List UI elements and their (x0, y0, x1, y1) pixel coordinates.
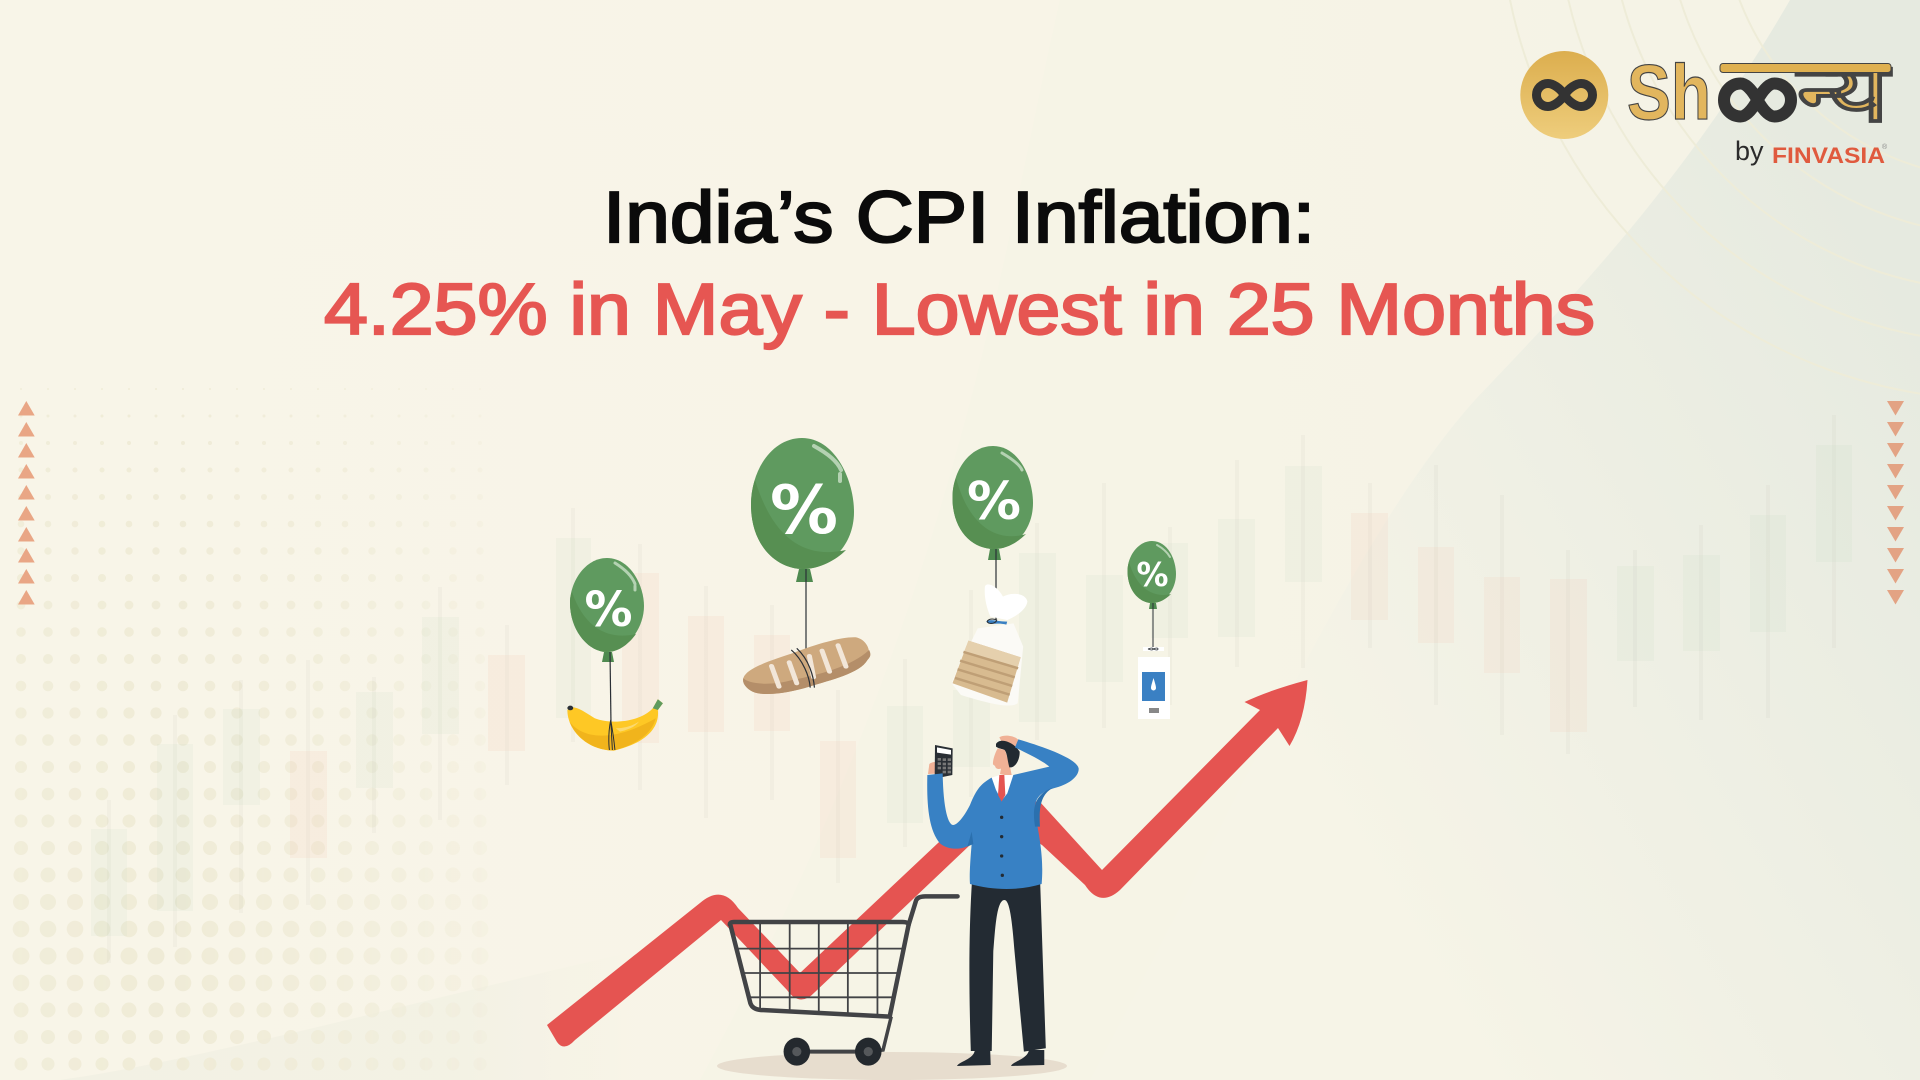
red rising arrow (547, 680, 1308, 1047)
man: legs and shoes (957, 883, 1046, 1066)
man: sweater (927, 739, 1079, 889)
title (324, 178, 1595, 350)
balloon: bread bag: % (967, 472, 1021, 532)
balloon: milk (1128, 541, 1176, 648)
food: milk carton (1138, 647, 1170, 719)
man: shirt and tie (992, 775, 1013, 801)
food: bread bag (952, 584, 1027, 706)
logo byline: FINVASIA (1772, 143, 1885, 168)
shopping cart (730, 896, 958, 1066)
logo: Shoonya by Finvasia (1520, 45, 1893, 168)
balloon: milk: % (1136, 555, 1168, 594)
logo wordmark: Sh (1627, 48, 1711, 136)
title line 1: India’s CPI Inflation: (603, 178, 1315, 258)
balloon: banana: % (584, 582, 632, 638)
balloon: bread (751, 438, 854, 650)
logo byline: ® (1882, 143, 1888, 151)
man: buttons (1000, 816, 1004, 877)
man: hands and neck (928, 762, 943, 774)
balloon: bread bag (952, 446, 1033, 620)
logo icon: gold circle with infinity (1520, 51, 1608, 139)
background: concentric arcs (1500, 0, 1920, 400)
man: upper body (927, 736, 1079, 889)
decorative down triangles (1887, 401, 1904, 604)
logo byline: by (1735, 136, 1764, 166)
logo wordmark: न्य (1794, 45, 1893, 139)
food: banana (567, 699, 663, 751)
background: candlestick chart (91, 415, 1852, 963)
logo wordmark (1627, 45, 1893, 139)
title line 2: 4.25% in May - Lowest in 25 Months (324, 270, 1595, 350)
decorative up triangles (18, 401, 35, 604)
man: hair (996, 741, 1020, 767)
food: bread loaf (743, 637, 870, 694)
balloon: banana (570, 558, 644, 725)
man: calculator (935, 745, 953, 779)
balloon: bread: % (770, 471, 838, 549)
logo byline (1735, 136, 1888, 168)
background: halftone dot field (21, 389, 490, 1064)
man with calculator (927, 736, 1079, 1066)
ground shadow (717, 1052, 1067, 1080)
